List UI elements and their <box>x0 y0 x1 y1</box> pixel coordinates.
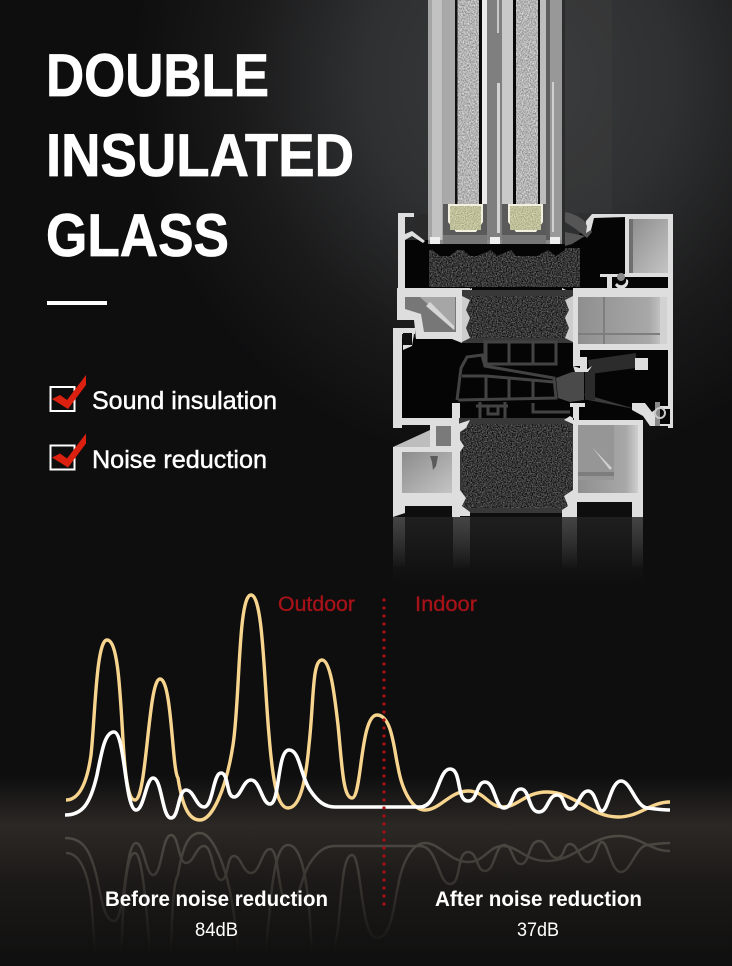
title: INSULATED <box>46 122 354 189</box>
caption: before noise reduction: Before noise reduction <box>105 888 328 911</box>
gasket pin <box>617 273 625 281</box>
title divider <box>47 301 107 305</box>
left mid wall <box>393 328 463 428</box>
upper right box <box>625 214 673 275</box>
double glass panes <box>428 0 565 246</box>
title: GLASS <box>46 202 229 269</box>
title: DOUBLE <box>46 42 269 109</box>
gaskets <box>411 212 592 246</box>
right mid profile <box>570 344 673 426</box>
upper left chamber <box>397 290 470 343</box>
chart reflection <box>65 832 670 936</box>
label: outdoor: Outdoor <box>278 593 355 616</box>
lower foam core <box>459 418 574 513</box>
white aluminium profiles <box>397 213 673 428</box>
lower left chamber <box>393 420 470 517</box>
upper foam block <box>428 244 580 287</box>
lower right chamber <box>562 416 643 517</box>
central seal plug <box>556 372 584 402</box>
caption: before noise reduction: 84dB <box>195 920 238 941</box>
noise reduction chart <box>65 593 670 958</box>
label: indoor: Indoor <box>415 593 477 616</box>
caption: after noise reduction <box>435 888 642 941</box>
window frame cross-section <box>393 212 673 517</box>
black frame cavities <box>402 217 670 422</box>
after curve <box>65 732 670 818</box>
before curve <box>66 595 670 820</box>
right mid gasket <box>584 353 640 410</box>
central thermal break <box>457 342 570 418</box>
lock hook detail <box>655 402 670 426</box>
caption: after noise reduction: 37dB <box>517 920 559 941</box>
feature checklist <box>50 375 277 474</box>
glass spacer left <box>448 204 483 232</box>
glass spacer right <box>508 204 543 232</box>
feature: sound insulation: Sound insulation <box>92 387 277 415</box>
icon: checkbox sound insulation <box>50 375 86 411</box>
outdoor indoor divider <box>382 600 386 906</box>
upper right chamber <box>573 288 673 350</box>
feature: noise reduction: Noise reduction <box>92 446 267 474</box>
glazing channels <box>443 204 546 246</box>
caption: before noise reduction <box>105 888 328 941</box>
title <box>46 42 354 269</box>
icon: checkbox noise reduction <box>50 434 86 470</box>
caption: after noise reduction: After noise reduction <box>435 888 642 911</box>
upper central foam core <box>462 290 573 343</box>
window frame reflection <box>393 517 643 585</box>
